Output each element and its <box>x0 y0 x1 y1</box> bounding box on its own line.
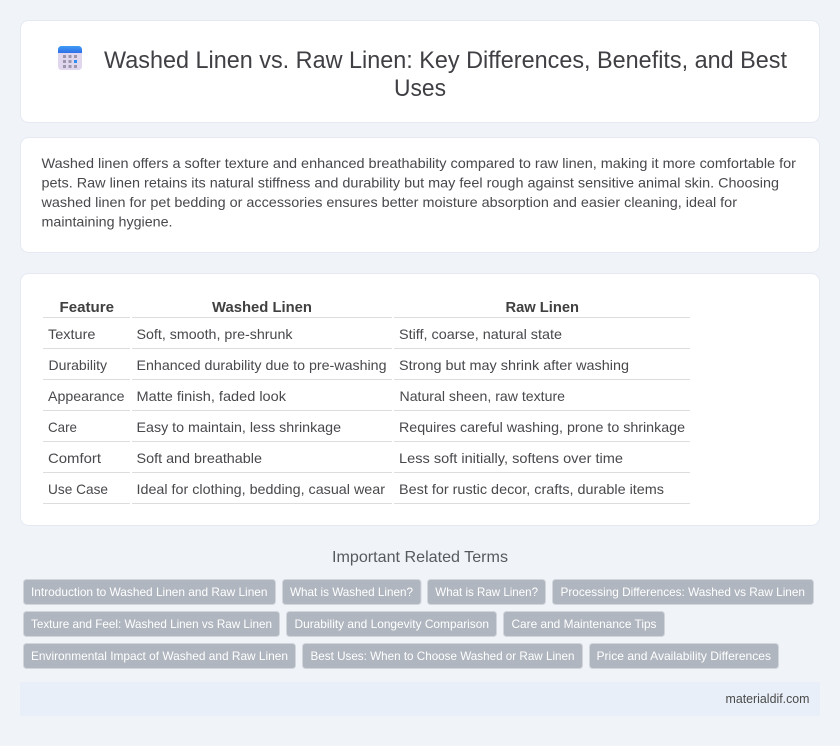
tags: related terms: Durability and Longevity Comparison <box>294 617 489 631</box>
table row: Use Case: Best for rustic decor, crafts, durable items <box>399 481 664 497</box>
table row: Use Case: Use Case <box>48 481 108 497</box>
heading: related terms: Important Related Terms <box>332 549 508 566</box>
tags: related terms: Price and Availability Differences <box>596 649 771 663</box>
panel: summary paragraph <box>20 138 820 252</box>
tags: related terms: Texture and Feel: Washed Linen vs Raw Linen <box>31 617 272 631</box>
table header: Feature <box>60 299 114 316</box>
table row: Care: Easy to maintain, less shrinkage <box>136 419 341 435</box>
table row: Care: Requires careful washing, prone to shrinkage <box>399 419 685 435</box>
tags: related terms: Environmental Impact of Washed and Raw Linen <box>31 649 288 663</box>
text block: summary: maintaining hygiene. <box>42 214 172 230</box>
table row: Comfort: Comfort <box>48 450 101 466</box>
title: Uses <box>394 75 446 102</box>
table row: Durability: Durability <box>48 357 107 373</box>
table row: Appearance <box>48 388 565 404</box>
title: Washed Linen vs. Raw Linen: Key Differences, Benefits, and Best <box>104 47 787 74</box>
table row: Comfort <box>48 450 623 466</box>
table row: Durability: Strong but may shrink after washing <box>399 357 629 373</box>
table row: Use Case: Ideal for clothing, bedding, casual wear <box>136 481 385 497</box>
tags: related terms: Introduction to Washed Linen and Raw Linen <box>31 585 268 599</box>
table row: Comfort: Less soft initially, softens over time <box>399 450 623 466</box>
table row: Appearance: Appearance <box>48 388 125 404</box>
table row: Use Case <box>48 481 664 497</box>
text block: summary <box>40 155 796 230</box>
title <box>104 47 787 102</box>
footer bar <box>20 682 820 716</box>
panel: title header <box>20 20 820 122</box>
tags: related terms: Care and Maintenance Tips <box>512 617 656 631</box>
panel: comparison table <box>20 274 820 526</box>
tags: related terms: Processing Differences: Washed vs Raw Linen <box>560 585 805 599</box>
table header <box>60 299 579 316</box>
table row: Texture: Soft, smooth, pre-shrunk <box>136 326 294 342</box>
text block: summary: Washed linen offers a softer texture and enhanced breathability compared to raw linen, making it more comfortable for <box>42 155 796 171</box>
table row: Texture <box>48 326 562 342</box>
table row: Texture: Stiff, coarse, natural state <box>399 326 562 342</box>
footer source text: materialdif.com <box>726 691 810 706</box>
table header: Raw Linen <box>506 299 579 316</box>
tags: related terms: What is Washed Linen? <box>290 585 413 599</box>
tags: related terms <box>24 580 814 668</box>
text block: summary: pets. Raw linen retains its natural stiffness and durability but may feel rough against sensitive animal skin. Choosing <box>42 174 779 190</box>
tags: related terms: Best Uses: When to Choose Washed or Raw Linen <box>310 649 574 663</box>
table header: Washed Linen <box>212 299 312 316</box>
tags: related terms: What is Raw Linen? <box>435 585 538 599</box>
icon: calendar <box>58 46 82 70</box>
table row: Comfort: Soft and breathable <box>136 450 262 466</box>
table row: Care: Care <box>48 419 77 435</box>
text block: summary: washed linen for pet bedding or accessories ensures better moisture absorption and easier cleaning, ideal for <box>40 194 737 210</box>
table row: Appearance: Natural sheen, raw texture <box>400 388 565 404</box>
table row: Durability: Enhanced durability due to pre-washing <box>136 357 386 373</box>
table row: Appearance: Matte finish, faded look <box>136 388 287 404</box>
table row: Texture: Texture <box>48 326 96 342</box>
table row: Durability <box>48 357 629 373</box>
table row: Care <box>48 419 685 435</box>
